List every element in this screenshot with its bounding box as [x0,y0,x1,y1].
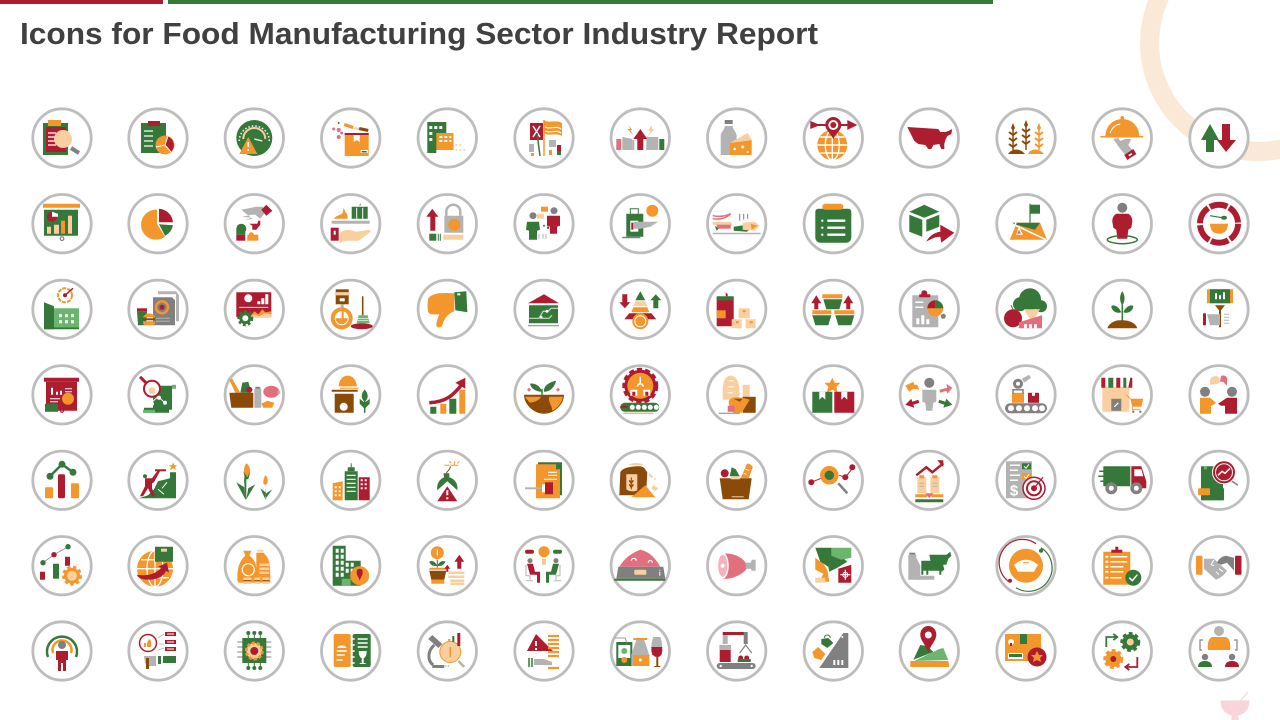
top bar green [168,0,993,4]
icon: cube with arrow [900,194,958,253]
decorative peach ring [1150,0,1280,152]
top bar red [0,0,163,4]
icon: boxes and star [804,366,862,424]
icon: bomb warning [418,451,476,510]
icon: gears and arrows [1093,622,1152,680]
icon: warning and coins [515,622,573,680]
icon: up down arrows [1190,109,1248,167]
icon: handshake deal [1190,366,1248,424]
icon: magnifier on chart doc [129,366,187,424]
icon: sprout in soil [1093,280,1152,338]
icon: clipboard pie [129,109,187,167]
icon: document and target [997,451,1055,510]
icon: clipboard search [33,109,91,167]
icon: robotic conveyor [997,366,1055,424]
icon: robot arm conveyor [708,622,766,680]
icon: growth bars [418,366,476,424]
icon: office buildings [418,109,476,167]
icon: corn plants [225,451,284,510]
title: Icons for Food Manufacturing Sector Industry Report [20,16,818,51]
icon: delivery truck [1093,451,1152,510]
icon: money plant [418,536,476,595]
icon: globe target arrow [804,109,862,167]
icon: chart and gear [33,536,91,595]
icon: pie chart [129,194,187,253]
icon: report and burger [129,280,187,338]
icon: cow and milk [900,536,958,595]
icon: person with arrows [900,366,958,424]
icon: lock and money [418,194,476,253]
icon: pet food bowl [611,536,670,595]
icon: grocery basket [225,366,284,424]
icon: building with pin [322,536,380,595]
icon: pyramid with arrows [611,280,670,338]
icon: USA map [900,109,958,167]
icon: magnifier nodes [804,451,862,510]
icon: trend and bottles [900,451,958,510]
icon: document magnifier [1190,451,1248,510]
icon: gear conveyor [611,366,670,424]
icon: microscope and coin [418,622,476,680]
icon: weight and tags [804,622,862,680]
icon: drinks [611,622,670,680]
icon: gauge warning [225,109,284,167]
icon: veggie basket [708,451,766,510]
icon: dashboard gear [225,280,284,338]
icon: packaged box [322,109,380,167]
icon: funnel chart [1190,280,1248,338]
icon: jar and boxes [708,280,766,338]
icon: clipboard pie analysis [900,280,958,338]
icon: checklist clipboard [804,194,862,253]
icon: business meeting [515,536,573,595]
icon: hand with puzzle [225,194,284,253]
icon: storefront [1093,366,1152,424]
icon grid [33,109,1248,680]
icon: handshake [1190,536,1248,595]
icon: globe and box [129,536,187,595]
icon: house circuit [515,280,573,338]
icon: factory target [33,280,91,338]
icon: milk and cheese [708,109,766,167]
icon: map pin [900,622,958,680]
icon: growth arrow with buildings [611,109,670,167]
icon: document and target: $ [1010,482,1019,499]
icon: wheat plants [997,109,1055,167]
icon: bag with coin [611,194,670,253]
icon: pie dish [997,536,1055,595]
icon: ham [708,536,766,595]
icon: serving cloche [1093,109,1152,167]
icon: climbing person [129,451,187,510]
icon: grain sack [611,451,670,510]
icon: silo grain bag [322,366,380,424]
icon: money bags [225,536,284,595]
icon: thumbs down [418,280,476,338]
icon: flask and broom [322,280,380,338]
icon: signal person [33,622,91,680]
icon: vegetables [997,280,1055,338]
decorative goblet [1221,692,1249,720]
icon: city buildings [322,451,380,510]
icon: land with flag [997,194,1055,253]
icon: red presentation [33,366,91,424]
icon: bowl cycle [1190,194,1248,253]
icon: flag and poles [515,109,573,167]
icon: two people talking [515,194,573,253]
icon: box with star badge [997,622,1055,680]
icon: regional map [804,536,862,595]
icon: soil sprout [515,366,573,424]
icon: microchip [225,622,284,680]
icon: menu book [322,622,380,680]
icon: bars and nodes [33,451,91,510]
icon: feedback list [129,622,187,680]
icon: team hierarchy [1190,622,1248,680]
icon: food containers [804,280,862,338]
icon: contract and gavel [515,451,573,510]
icon: bread [708,366,766,424]
icon: hand with food [322,194,380,253]
icon: presentation board [33,194,91,253]
icon: clipboard check [1093,536,1152,595]
icon: seafood platter [708,194,766,253]
icon: person at location [1093,194,1152,253]
